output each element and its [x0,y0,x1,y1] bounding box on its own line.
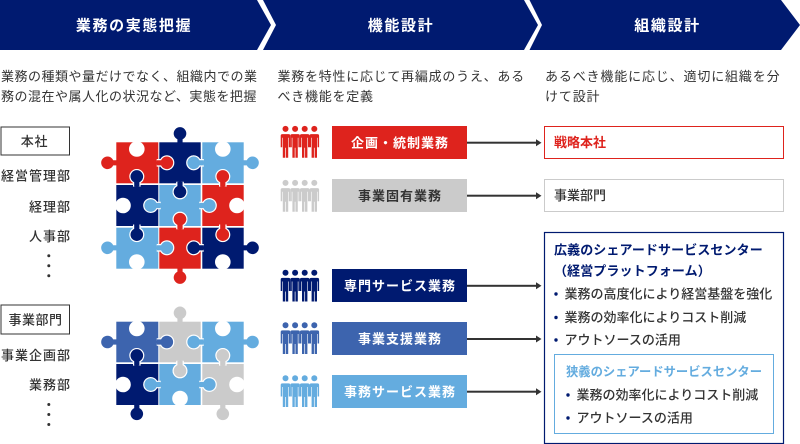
text: column 3 description: あるべき機能に応じ、適切に組織を分 [545,69,780,84]
text: column 3 description [545,69,780,104]
bar: 事業固有業務 [332,179,467,212]
outer tabs [101,127,259,284]
bar: 事務サービス業務: 事務サービス業務 [344,384,456,400]
text: column 2 description: べき機能を定義 [278,89,374,104]
department names: 事業企画部 [1,348,71,363]
puzzle: business division [101,307,259,420]
bullet list [566,388,758,426]
panel: head office list [1,127,71,277]
puzzle: head office [101,127,259,284]
label box: 本社: 本社 [21,134,48,149]
panel: business division list [1,305,71,426]
chevron: 機能設計 [263,0,538,50]
heading: narrow shared service center: 狭義のシェアードサービスセンター [566,364,762,379]
vertical dots [47,254,50,277]
department names [1,348,71,392]
label box: 事業部門: 事業部門 [8,312,63,328]
holes on outer edges [115,321,245,406]
text: column 1 description: 業務の種類や量だけでなく、組織内での業 [1,69,258,84]
bullet list: アウトソースの活用 [576,410,693,426]
text: column 2 description [278,69,525,104]
department names [1,168,71,244]
vertical dots [47,403,50,426]
department names: 経営管理部 [1,168,71,184]
text: column 2 description: 業務を特性に応じて再編成のうえ、ある [278,69,525,84]
bullet list: アウトソースの活用 [564,332,681,348]
box: 戦略本社 [544,126,784,158]
bar: 企画・統制業務: 企画・統制業務 [351,136,449,150]
heading: broad shared service center: （経営プラットフォーム） [554,264,711,278]
arrow: 専門サービス業務 to shared center [467,282,542,289]
bullet list: 業務の効率化によりコスト削減 [576,388,758,402]
department names: 業務部 [29,378,71,392]
panel: narrow shared service center [554,354,774,434]
box: 戦略本社: 戦略本社 [554,135,606,150]
department names: 経理部 [29,200,71,214]
text: column 1 description: 務の混在や属人化の状況など、実態を把握 [1,89,257,104]
heading: broad shared service center: 広義のシェアードサービスセンター [554,242,763,258]
chevron: 組織設計: 組織設計 [634,18,701,34]
bullet list [554,286,772,348]
text: column 1 description [1,69,258,104]
chevron: 業務の実態把握: 業務の実態把握 [76,16,192,34]
interlocking tabs [130,156,229,254]
box: 事業部門: 事業部門 [554,188,606,203]
bar: 事業支援業務 [332,322,467,355]
arrow: 事業支援業務 to shared center [467,336,542,342]
bar: 専門サービス業務: 専門サービス業務 [344,278,456,294]
label box: 本社 [1,127,70,155]
header chevrons [0,0,800,50]
arrow: 事業固有業務 to 事業部門 [467,192,542,199]
chevron: 機能設計: 機能設計 [368,16,434,34]
box: 事業部門 [544,180,784,212]
arrow: 事務サービス業務 to shared center [467,388,542,395]
text: column 3 description: けて設計 [545,89,600,104]
icon: light blue people [281,375,319,407]
icon: gray people [281,180,319,212]
chevron: 業務の実態把握 [0,0,271,50]
outer tabs [101,307,259,420]
panel: broad shared service center [544,232,784,444]
icon: red people [281,126,319,158]
holes on outer edges [115,141,245,270]
bar: 事業支援業務: 事業支援業務 [358,332,442,346]
icon: navy people [281,270,319,302]
bar: 企画・統制業務 [332,126,467,159]
arrow: 企画・統制業務 to 戦略本社 [467,139,542,146]
interlocking tabs [130,336,229,391]
icon: blue people [281,322,319,354]
bullet list: 業務の効率化によりコスト削減 [564,310,746,325]
chevron: 組織設計 [530,0,800,50]
department names: 人事部 [29,229,71,244]
bar: 専門サービス業務 [332,269,467,302]
bar: 事務サービス業務 [332,375,467,408]
bullet list: 業務の高度化により経営基盤を強化 [564,286,772,302]
bar: 事業固有業務: 事業固有業務 [358,188,442,204]
heading: broad shared service center [554,242,763,278]
